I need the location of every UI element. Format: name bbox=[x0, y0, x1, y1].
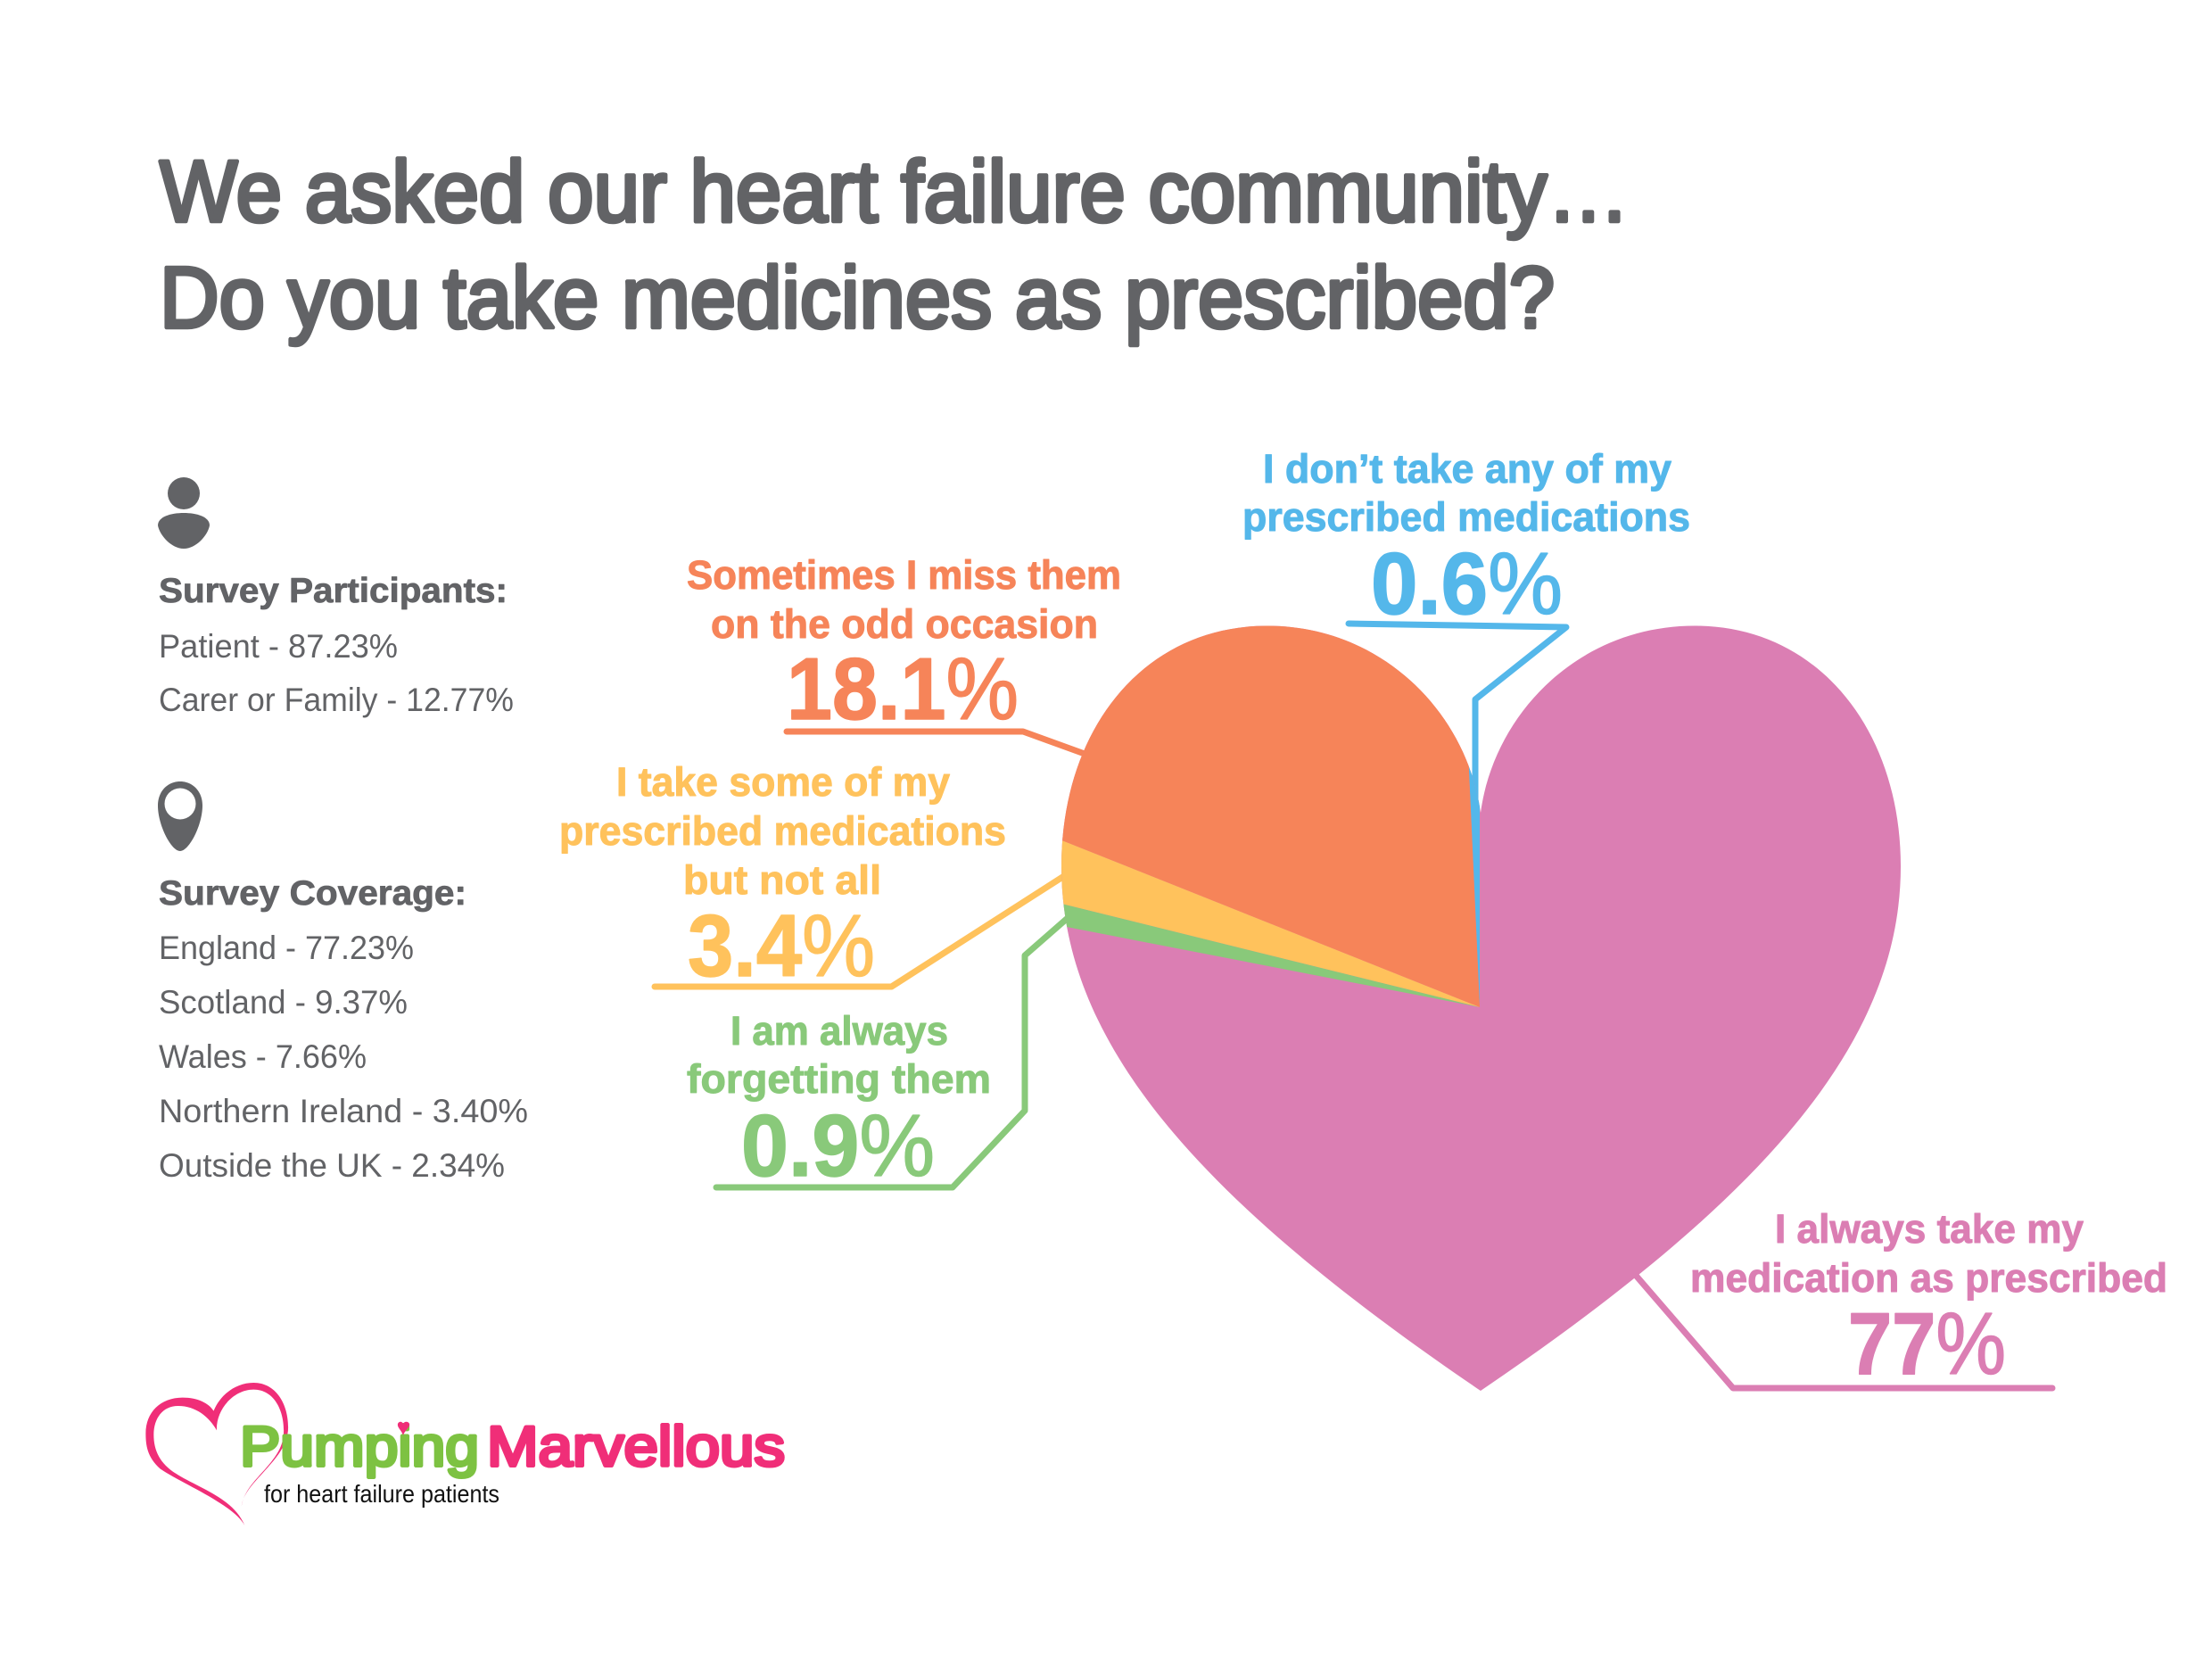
panel: survey coverage: England - 77.23% bbox=[159, 930, 414, 966]
leader line: sometimes miss bbox=[787, 732, 1085, 754]
label: sometimes miss: 18.1% bbox=[787, 640, 1019, 738]
label: always forgetting: 0.9% bbox=[741, 1096, 935, 1195]
logo heart outline bbox=[145, 1383, 288, 1525]
label: always forgetting: forgetting them bbox=[687, 1056, 991, 1102]
infographic canvas bbox=[145, 156, 2166, 1525]
panel: survey coverage: Wales - 7.66% bbox=[159, 1038, 367, 1075]
label: don't take any: prescribed medications bbox=[1242, 494, 1690, 540]
panel: survey participants: Carer or Family - 12.77% bbox=[159, 682, 514, 718]
slice: sometimes miss 18.1% bbox=[1062, 626, 1480, 1007]
label: always take: I always take my bbox=[1775, 1206, 2084, 1252]
panel: survey coverage: Survey Coverage: bbox=[159, 874, 466, 913]
label: don't take any: 0.6% bbox=[1371, 534, 1563, 632]
panel: survey coverage bbox=[159, 874, 528, 1184]
label: always take: medication as prescribed bbox=[1690, 1255, 2167, 1301]
logo small heart bbox=[398, 1422, 409, 1435]
label: take some: but not all bbox=[683, 857, 881, 903]
label: always forgetting: I am always bbox=[730, 1008, 948, 1054]
icon: location pin bbox=[158, 781, 202, 851]
label: always take: 77% bbox=[1848, 1294, 2006, 1393]
leader line: always take bbox=[1632, 1271, 2052, 1388]
label: take some bbox=[559, 759, 1006, 995]
panel: survey participants: Patient - 87.23% bbox=[159, 628, 398, 665]
panel: survey coverage: Outside the UK - 2.34% bbox=[159, 1147, 505, 1184]
logo: Pumping Marvellous: Marvellous bbox=[487, 1416, 785, 1478]
title: We asked our heart failure community… bbox=[160, 143, 1630, 240]
logo tagline: for heart failure patients bbox=[264, 1480, 499, 1508]
logo: Pumping Marvellous bbox=[145, 1383, 785, 1525]
title bbox=[160, 143, 1630, 346]
panel: survey coverage: Scotland - 9.37% bbox=[159, 984, 408, 1021]
label: sometimes miss: on the odd occasion bbox=[711, 601, 1098, 647]
logo wordmark: Pumping bbox=[240, 1416, 479, 1478]
title: Do you take medicines as prescribed? bbox=[160, 249, 1555, 346]
panel: survey participants bbox=[159, 572, 514, 718]
label: sometimes miss: Sometimes I miss them bbox=[687, 552, 1121, 598]
label: sometimes miss bbox=[687, 552, 1121, 738]
leader line: always forgetting bbox=[716, 918, 1068, 1187]
label: always take bbox=[1690, 1206, 2167, 1393]
panel: survey coverage: Northern Ireland - 3.40% bbox=[159, 1093, 528, 1129]
slice: take some 3.4% bbox=[1061, 840, 1479, 1007]
label: don't take any: I don’t take any of my bbox=[1263, 446, 1671, 492]
leader line: don't take any bbox=[1349, 624, 1566, 821]
label: take some: prescribed medications bbox=[559, 808, 1006, 854]
leader line: take some bbox=[655, 876, 1064, 987]
label: take some: I take some of my bbox=[616, 759, 950, 805]
label: take some: 3.4% bbox=[688, 897, 875, 995]
heart pie chart bbox=[1061, 626, 1901, 1391]
panel: survey participants: Survey Participants: bbox=[159, 572, 508, 610]
label: always forgetting bbox=[687, 1008, 991, 1195]
slice: always forgetting 0.9% bbox=[1063, 905, 1479, 1007]
slice: don't take any 0.6% bbox=[1468, 765, 1480, 1004]
label: don't take any bbox=[1242, 446, 1690, 632]
icon: person bbox=[158, 477, 210, 549]
